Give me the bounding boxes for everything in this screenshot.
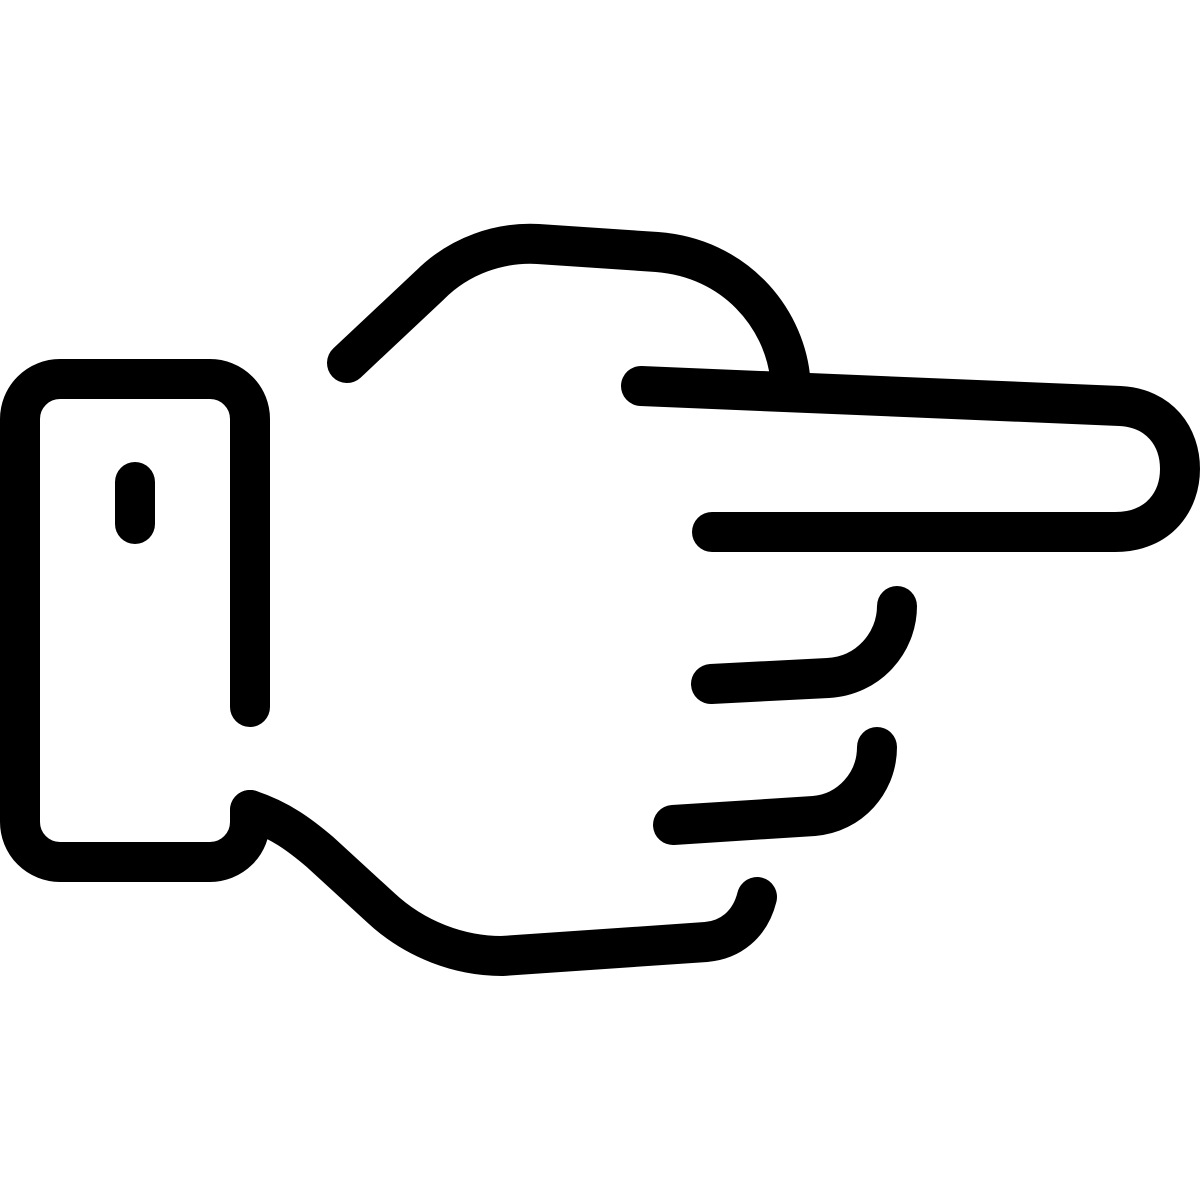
hand bottom outline <box>250 810 757 956</box>
hand top outline <box>347 244 790 376</box>
index finger <box>641 386 1180 532</box>
cuff <box>20 379 250 862</box>
middle finger <box>711 606 897 684</box>
ring finger <box>673 747 877 825</box>
